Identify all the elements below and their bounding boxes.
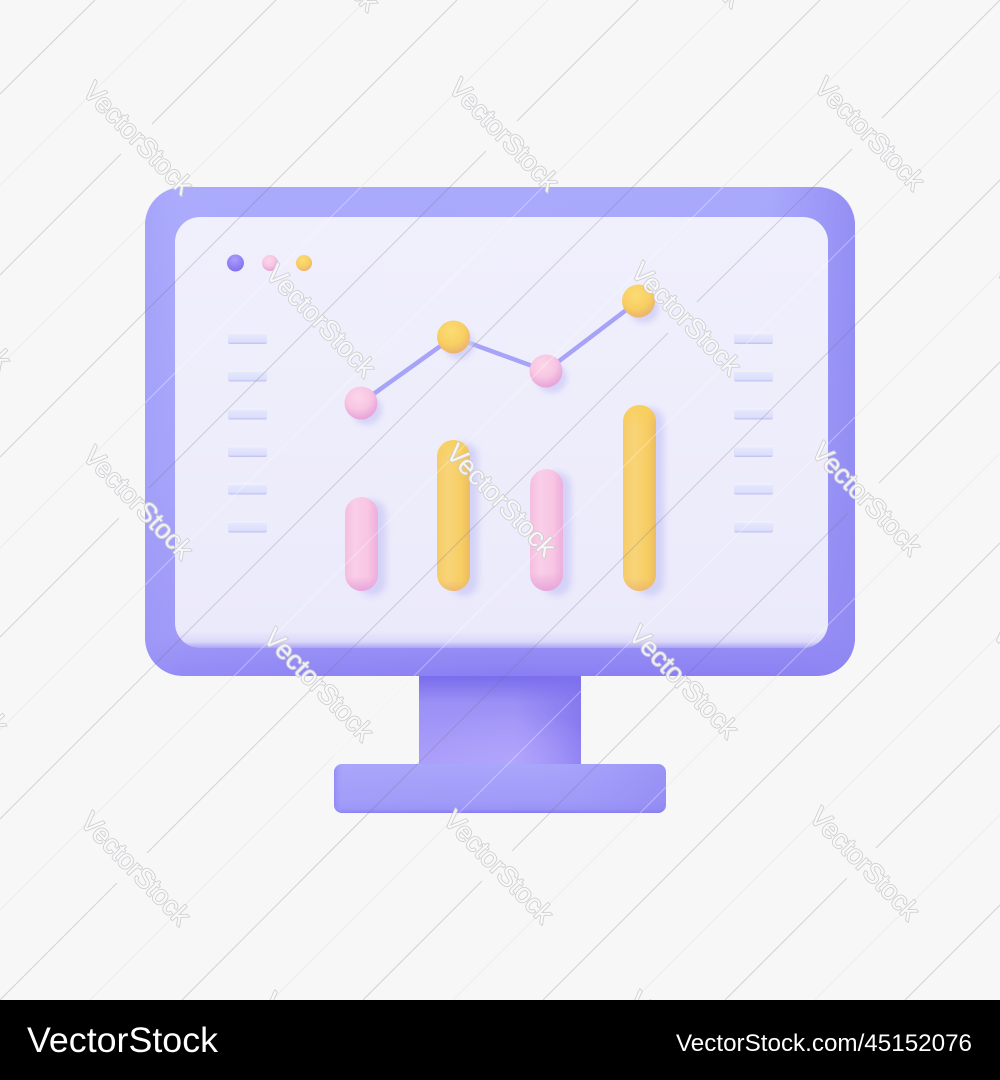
dot pink — [262, 255, 278, 271]
bar 3 pink — [530, 469, 571, 596]
footer brand: VectorStock — [27, 1021, 219, 1060]
watermark text: VectorStock — [443, 73, 565, 197]
bar chart — [345, 405, 664, 596]
point 2 yellow — [437, 320, 474, 359]
left axis ticks — [228, 332, 267, 532]
line — [361, 301, 638, 403]
footer bar — [0, 1000, 1000, 1080]
watermark text: VectorStock — [258, 623, 380, 747]
right axis ticks — [734, 332, 773, 532]
dot purple — [227, 254, 244, 272]
bar 1 pink — [345, 497, 386, 596]
screen — [175, 217, 828, 648]
watermark text: VectorStock — [623, 620, 745, 744]
watermark text: VectorStock — [77, 441, 199, 565]
watermark text: VectorStock — [77, 76, 199, 201]
point 1 pink — [344, 386, 382, 425]
watermark text: VectorStock — [438, 805, 560, 929]
stand neck — [419, 676, 581, 766]
monitor — [145, 187, 855, 813]
watermark text: VectorStock — [809, 72, 931, 196]
watermark text: VectorStock — [804, 802, 926, 926]
point 4 yellow — [622, 284, 659, 323]
watermark text: VectorStock — [440, 438, 562, 563]
bar 4 yellow — [623, 405, 664, 596]
window control dots — [227, 254, 312, 272]
footer image id: VectorStock.com/45152076 — [676, 1030, 972, 1057]
stand base — [334, 764, 666, 813]
monitor frame — [145, 187, 855, 676]
bar 2 yellow — [437, 440, 478, 596]
watermark text: VectorStock — [625, 257, 747, 381]
watermark text: VectorStock — [260, 259, 382, 383]
light diagonal lines over monitor — [145, 187, 855, 813]
point 3 pink — [530, 354, 567, 393]
watermark text: VectorStock — [806, 437, 928, 561]
line chart — [344, 284, 659, 425]
dot yellow — [296, 255, 312, 271]
watermark text: VectorStock — [75, 807, 197, 931]
